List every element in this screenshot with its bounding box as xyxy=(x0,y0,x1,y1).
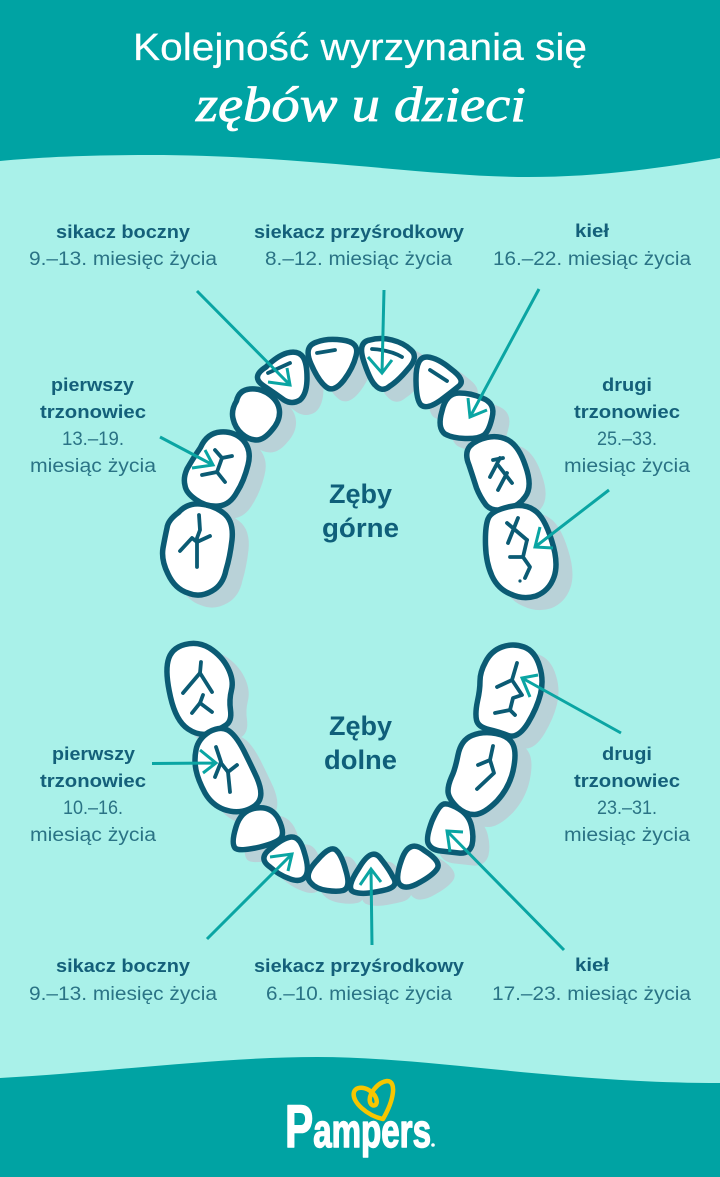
tooth: upper right second molar xyxy=(485,506,556,598)
logo: Pampers xyxy=(285,1081,435,1160)
arrow: lower central incisor xyxy=(360,869,381,945)
label: lower second molar: miesiąc życia xyxy=(564,825,690,846)
label: upper first molar: pierwszy xyxy=(51,375,134,395)
heading: upper teeth: górne xyxy=(322,513,399,543)
tooth: upper left first molar xyxy=(184,432,249,506)
title xyxy=(133,27,587,132)
label: lower second molar: 23.–31. xyxy=(597,798,657,819)
label: lower first molar: 10.–16. xyxy=(63,798,123,819)
label: lower first molar: miesiąc życia xyxy=(30,825,156,846)
label: upper canine: kieł xyxy=(575,221,609,241)
upper teeth xyxy=(163,338,556,598)
footer band xyxy=(0,1057,720,1177)
label: upper lateral incisor: 9.–13. miesięc życia xyxy=(29,249,217,270)
tooth: lower right first molar xyxy=(448,733,515,815)
label: lower lateral incisor xyxy=(29,956,217,1005)
arrow: upper second molar xyxy=(535,490,609,548)
label: lower central incisor xyxy=(254,956,464,1005)
heading: upper teeth: Zęby xyxy=(329,479,392,509)
tooth: upper left central incisor xyxy=(308,339,357,389)
label: upper second molar: trzonowiec xyxy=(574,402,680,422)
tooth: upper left canine xyxy=(232,389,280,440)
tooth: lower right lateral incisor xyxy=(398,846,438,887)
tooth: lower left second molar xyxy=(167,643,232,734)
arrow: lower canine xyxy=(447,831,564,950)
arrow: upper lateral incisor xyxy=(197,291,290,385)
label: upper first molar xyxy=(30,375,156,477)
arrow: lower second molar xyxy=(522,675,621,733)
arrow: lower first molar xyxy=(152,750,216,773)
tooth: upper right second incisor xyxy=(416,357,461,407)
label: lower canine: kieł xyxy=(575,955,609,975)
label: upper central incisor: 8.–12. miesiąc życia xyxy=(265,249,452,270)
tooth: upper right central incisor xyxy=(362,338,414,389)
label: lower lateral incisor: sikacz boczny xyxy=(56,956,190,976)
arrows xyxy=(152,289,621,950)
tooth: lower right central incisor xyxy=(350,854,395,893)
label: upper lateral incisor: sikacz boczny xyxy=(56,222,190,242)
tooth: lower left canine xyxy=(233,808,282,850)
label: upper first molar: miesiąc życia xyxy=(30,456,156,477)
tooth shadows xyxy=(177,348,570,903)
label: upper lateral incisor xyxy=(29,222,217,270)
tooth: lower left lateral incisor xyxy=(264,837,307,880)
label: upper second molar: drugi xyxy=(602,375,652,395)
arrow: upper first molar xyxy=(160,437,213,468)
label: upper central incisor: siekacz przyśrodkowy xyxy=(254,222,464,242)
label: upper first molar: trzonowiec xyxy=(40,402,146,422)
logo: Pampers: Pampers xyxy=(285,1093,431,1160)
tooth: lower right canine xyxy=(428,804,473,853)
heading: lower teeth: dolne xyxy=(324,745,397,775)
label: lower first molar xyxy=(30,744,156,846)
label: lower central incisor: 6.–10. miesiąc życia xyxy=(266,984,452,1005)
tooth: upper left second molar xyxy=(163,504,232,595)
label: lower canine xyxy=(492,955,691,1005)
tooth: lower left first molar xyxy=(195,728,261,812)
header band xyxy=(0,0,720,177)
title: zębów u dzieci xyxy=(195,76,526,132)
label: lower lateral incisor: 9.–13. miesięc życia xyxy=(29,984,217,1005)
label: lower canine: 17.–23. miesiąc życia xyxy=(492,984,691,1005)
title: Kolejność wyrzynania się xyxy=(133,27,587,69)
label: lower first molar: trzonowiec xyxy=(40,771,146,791)
arrow: lower lateral incisor xyxy=(207,854,292,939)
label: upper canine xyxy=(493,221,691,270)
label: upper central incisor xyxy=(254,222,464,270)
tooth: lower right second molar xyxy=(476,645,542,736)
label: lower first molar: pierwszy xyxy=(52,744,135,764)
label: lower central incisor: siekacz przyśrodkowy xyxy=(254,956,464,976)
lower teeth xyxy=(167,643,542,893)
label: upper second molar xyxy=(564,375,690,477)
heading: lower teeth: Zęby xyxy=(329,711,392,741)
tooth: upper right canine xyxy=(440,393,493,439)
heading: lower teeth xyxy=(324,711,397,775)
tooth: upper right first molar xyxy=(467,437,529,510)
heading: upper teeth xyxy=(322,479,399,543)
label: upper canine: 16.–22. miesiąc życia xyxy=(493,249,691,270)
label: lower second molar: drugi xyxy=(602,744,652,764)
label: upper first molar: 13.–19. xyxy=(62,429,124,450)
arrow: upper canine xyxy=(468,289,539,417)
arrow: upper central incisor xyxy=(368,290,392,373)
label: lower second molar xyxy=(564,744,690,846)
label: upper second molar: 25.–33. xyxy=(597,429,657,450)
label: lower second molar: trzonowiec xyxy=(574,771,680,791)
tooth: lower left central incisor xyxy=(308,849,348,891)
tooth: upper left lateral incisor xyxy=(257,352,307,402)
label: upper second molar: miesiąc życia xyxy=(564,456,690,477)
